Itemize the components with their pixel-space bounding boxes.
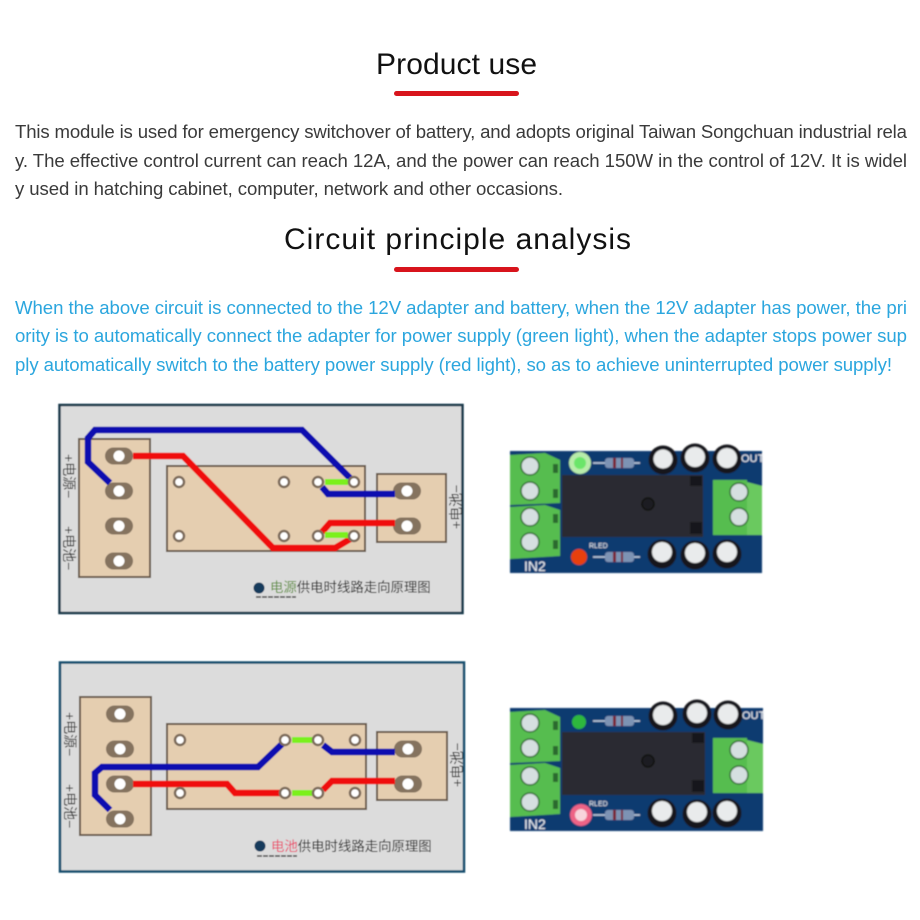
capacitors <box>648 700 742 828</box>
heading: Product use: Product use <box>376 48 537 81</box>
blue traces <box>88 430 395 494</box>
text block: module description: This module is used for emergency switchover of battery, and adopts original Taiwan Songchuan industrial rela <box>15 121 908 142</box>
caption: battery supply path: 电池供电时线路走向原理图 <box>271 839 432 854</box>
relay pins <box>174 477 359 541</box>
circuit board <box>510 451 762 573</box>
relay block <box>167 466 365 551</box>
right terminal block <box>377 474 446 542</box>
blue traces <box>95 744 395 810</box>
resistors <box>593 458 640 562</box>
panel: adapter power circuit diagram <box>60 405 464 613</box>
board label RLED: RLED <box>589 801 608 808</box>
panel: battery power circuit diagram <box>60 662 465 872</box>
left terminal block <box>79 439 150 577</box>
green relay contacts <box>325 482 348 535</box>
circuit board <box>510 708 763 831</box>
board label OUT: OUT <box>742 710 766 722</box>
right screw terminal <box>713 480 762 535</box>
capacitors <box>648 444 742 570</box>
red LED off <box>571 549 587 565</box>
heading underline: Product use <box>394 91 519 96</box>
heading underline: Circuit principle analysis <box>394 267 519 272</box>
board label OUT: OUT <box>741 453 764 465</box>
right terminal block <box>377 732 447 800</box>
resistors <box>593 716 640 820</box>
relay pins <box>175 735 360 798</box>
caption: power supply path: 电源供电时线路走向原理图 <box>270 580 431 595</box>
left screw terminals <box>510 710 560 817</box>
heading: Circuit principle analysis: Circuit principle analysis <box>284 223 631 256</box>
text block: module description: y used in hatching cabinet, computer, network and other occasions. <box>15 178 563 199</box>
text block: module description: y. The effective control current can reach 12A, and the power can reach 150W in the control of 12V. It is widel <box>15 150 907 171</box>
label: power input: +电源− <box>62 712 78 756</box>
label: battery input: +电池− <box>61 526 77 570</box>
photo: module with green LED lit <box>510 444 764 574</box>
board label IN2: IN2 <box>524 816 546 832</box>
relay <box>562 475 703 537</box>
relay block <box>167 724 366 809</box>
left terminal block <box>80 697 151 835</box>
text block: circuit explanation: When the above circuit is connected to the 12V adapter and battery, when the 12V adapter has power, the pri <box>15 297 907 318</box>
label: battery output: +电池− <box>448 485 464 529</box>
relay <box>562 732 705 795</box>
board label RLED: RLED <box>589 543 608 550</box>
red traces <box>133 456 395 548</box>
red LED lit <box>570 804 592 826</box>
label: battery input: +电池− <box>62 784 78 828</box>
text block: circuit explanation <box>15 297 907 375</box>
text block: circuit explanation: ply automatically switch to the battery power supply (red light), so as to achieve uninterrupted power supply! <box>15 354 892 375</box>
right screw terminal <box>713 738 763 793</box>
text block: module description <box>15 121 908 199</box>
text block: circuit explanation: ority is to automatically connect the adapter for power supply (green light), when the adapter stops power sup <box>15 325 907 346</box>
label: battery output: +电池− <box>449 743 465 787</box>
board label IN2: IN2 <box>524 558 546 574</box>
label: power input: +电源− <box>61 454 77 498</box>
red traces <box>133 781 395 793</box>
left screw terminals <box>510 453 560 559</box>
green LED off <box>572 715 586 729</box>
green relay contacts <box>292 740 313 793</box>
green LED lit <box>569 452 591 474</box>
photo: module with red LED lit <box>510 700 766 832</box>
